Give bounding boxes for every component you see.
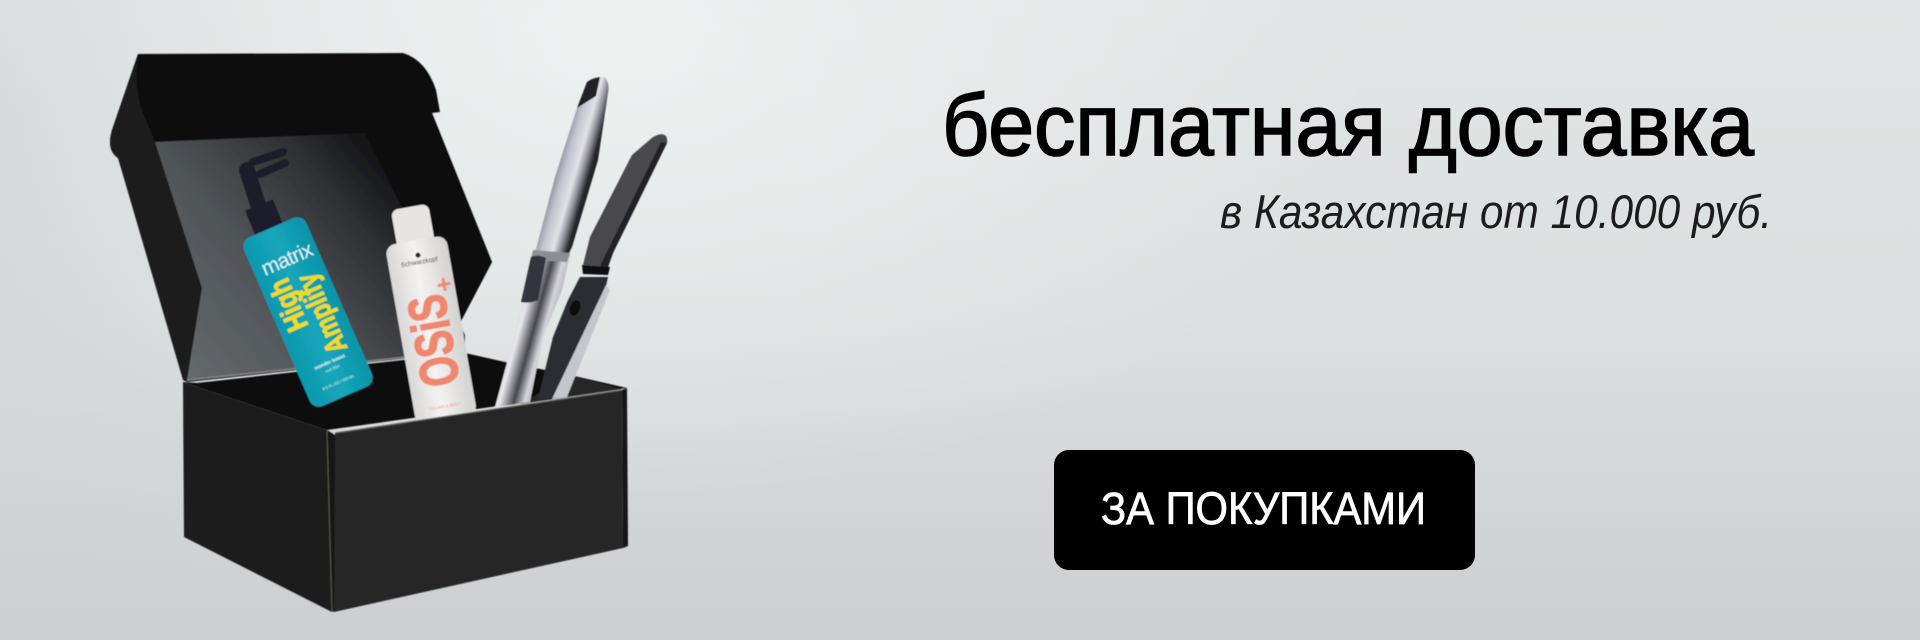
product: OSiS+ spray can: + (434, 268, 454, 300)
bottle body: root lifter (324, 363, 341, 374)
product: silver hair straightener (495, 77, 609, 407)
bottle body (240, 214, 376, 410)
box front faces (183, 382, 628, 612)
heading: бесплатная доставка (942, 77, 1755, 174)
bottle body: High (263, 274, 315, 336)
bottle body: wonder boost (313, 353, 346, 372)
box lid (110, 53, 492, 382)
product: OSiS+ spray can (379, 202, 478, 425)
bottle body: matrix (258, 238, 317, 281)
subheading: в Казахстан от 10.000 руб. (1220, 185, 1772, 238)
box interior (183, 353, 627, 430)
illustration: open black box with products (110, 53, 667, 612)
spray nozzle (247, 152, 285, 232)
product: OSiS+ spray can: VOLUME & BODY (428, 401, 462, 412)
button (1054, 450, 1475, 570)
product: Matrix High Amplify bottle (240, 152, 376, 410)
product: black hair straightener (538, 134, 667, 399)
button: ЗА ПОКУПКАМИ (1101, 483, 1426, 534)
interior right wall (520, 375, 622, 404)
bottle body: Amplify (290, 268, 354, 359)
product: OSiS+ spray can: Schwarzkopf (400, 256, 438, 269)
product: OSiS+ spray can: OSiS (397, 290, 472, 391)
bottle body: 8.5 FL.OZ / 250 ML (322, 373, 356, 391)
